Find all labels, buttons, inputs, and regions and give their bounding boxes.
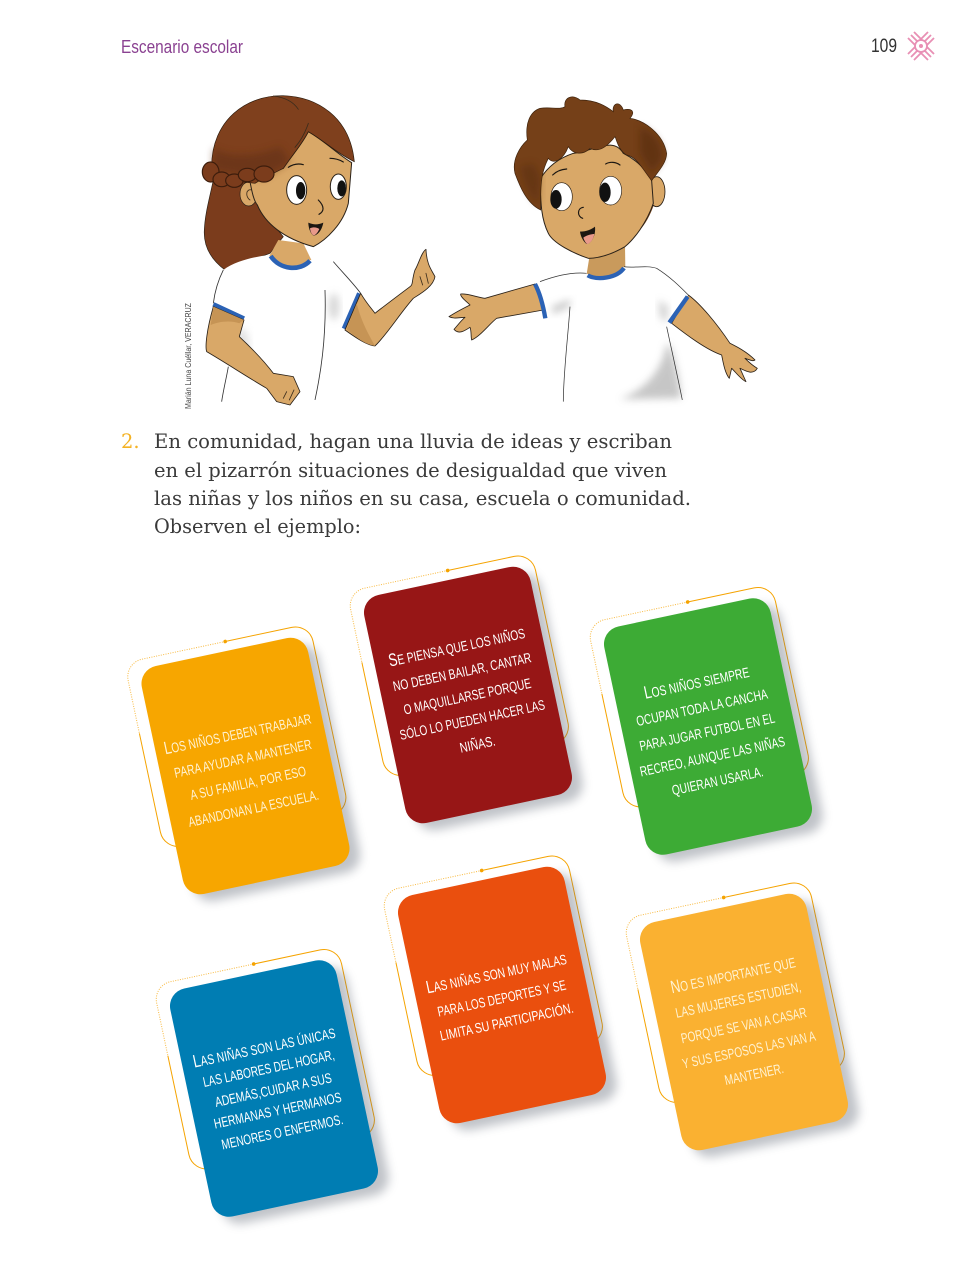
card: light orange, women's education <box>623 877 862 1165</box>
card: dark red, boys dance: NIÑAS. <box>458 733 497 756</box>
girl left arm <box>206 307 300 405</box>
card: blue, household chores: LAS NIÑAS SON LAS ÚNICAS <box>191 1022 337 1072</box>
illustration: girl <box>202 96 435 405</box>
card: green, football court: QUIERAN USARLA. <box>670 763 765 798</box>
boy shirt <box>540 267 688 402</box>
card: green, football court: RECREO, AUNQUE LAS NIÑAS <box>638 733 786 779</box>
card: dark red, boys dance: SE PIENSA QUE LOS NIÑOS <box>387 622 527 671</box>
girl neck <box>269 240 312 273</box>
card: green, football court: PARA JUGAR FUTBOL EN EL <box>638 710 776 754</box>
girl face <box>250 132 352 247</box>
girl collar and sleeve bands <box>213 256 359 329</box>
girl shirt <box>207 255 361 402</box>
icon: pink woven emblem <box>908 32 934 60</box>
card: orange, sports: LIMITA SU PARTICIPACIÓN. <box>438 1000 575 1044</box>
boy ear <box>648 177 665 207</box>
instruction text: En comunidad, hagan una lluvia de ideas y escriban <box>154 430 672 453</box>
girl front hair <box>212 96 354 183</box>
girl back hair <box>204 180 283 270</box>
card: dark red, boys dance: NO DEBEN BAILAR, CANTAR <box>391 649 533 694</box>
header: section title: Escenario escolar <box>121 37 243 57</box>
girl hair shading <box>213 147 290 178</box>
card: orange, sports: PARA LOS DEPORTES Y SE <box>436 977 567 1020</box>
instruction text: en el pizarrón situaciones de desigualdad que viven <box>154 459 667 482</box>
card: dark red, boys dance: SÓLO LO PUEDEN HACER LAS <box>398 696 546 743</box>
girl right arm <box>345 249 435 346</box>
card: blue, household chores: ADEMÁS,CUIDAR A SUS <box>213 1069 333 1110</box>
boy back hair piece <box>633 202 655 232</box>
boy brows and nose <box>553 162 620 218</box>
instruction text: las niñas y los niños en su casa, escuela o comunidad. <box>154 487 691 510</box>
card: green, football court: OCUPAN TODA LA CANCHA <box>635 685 770 729</box>
boy left arm <box>449 284 543 340</box>
illustration: boy <box>449 97 757 402</box>
girl mouth <box>308 223 323 236</box>
card: light orange, women's education: PORQUE SE VAN A CASAR <box>679 1004 808 1046</box>
card: light orange, women's education: NO ES IMPORTANTE QUE <box>669 951 797 997</box>
card: blue, household chores <box>153 944 392 1231</box>
boy hair shading <box>640 127 662 173</box>
card: yellow, boys work: LOS NIÑOS DEBEN TRABAJAR <box>162 708 313 758</box>
girl braid <box>202 162 274 187</box>
girl brows and nose <box>288 158 343 214</box>
card: blue, household chores: LAS LABORES DEL HOGAR, <box>201 1046 336 1090</box>
page number: 109 <box>871 36 897 57</box>
card: dark red, boys dance <box>347 550 586 838</box>
card: orange, sports <box>381 850 620 1138</box>
card: green, football court: LOS NIÑOS SIEMPRE <box>642 661 751 703</box>
instruction text <box>121 430 691 538</box>
card: green, football court <box>587 582 826 869</box>
cards <box>124 550 862 1231</box>
girl ear detail <box>247 190 252 200</box>
illustration credit: Marián Luna Cuéllar, VERACRUZ <box>183 303 193 409</box>
card: yellow, boys work: PARA AYUDAR A MANTENER <box>173 736 313 781</box>
boy right arm <box>672 295 757 382</box>
card: yellow, boys work: ABANDONAN LA ESCUELA. <box>187 787 320 830</box>
instruction text: Observen el ejemplo: <box>154 515 361 538</box>
boy collar and sleeve bands <box>535 268 688 323</box>
boy eyes <box>550 176 622 211</box>
boy hair <box>514 97 667 210</box>
instruction text: 2. <box>121 430 140 453</box>
card: light orange, women's education: Y SUS ESPOSOS LAS VAN A <box>681 1028 817 1072</box>
card: dark red, boys dance: O MAQUILLARSE PORQUE <box>402 675 532 718</box>
card: blue, household chores: MENORES O ENFERMOS. <box>220 1111 344 1152</box>
card: light orange, women's education: LAS MUJERES ESTUDIEN, <box>674 979 803 1021</box>
boy mouth <box>580 227 595 244</box>
card: yellow, boys work <box>124 621 364 909</box>
boy neck <box>587 243 625 280</box>
boy face <box>541 145 653 258</box>
card: yellow, boys work: A SU FAMILIA, POR ESO <box>189 763 307 803</box>
card: orange, sports: LAS NIÑAS SON MUY MALAS <box>424 948 568 997</box>
girl ear <box>240 182 257 206</box>
card: light orange, women's education: MANTENER. <box>723 1060 785 1088</box>
girl eyes <box>287 174 346 204</box>
card: blue, household chores: HERMANAS Y HERMANOS <box>212 1089 343 1132</box>
